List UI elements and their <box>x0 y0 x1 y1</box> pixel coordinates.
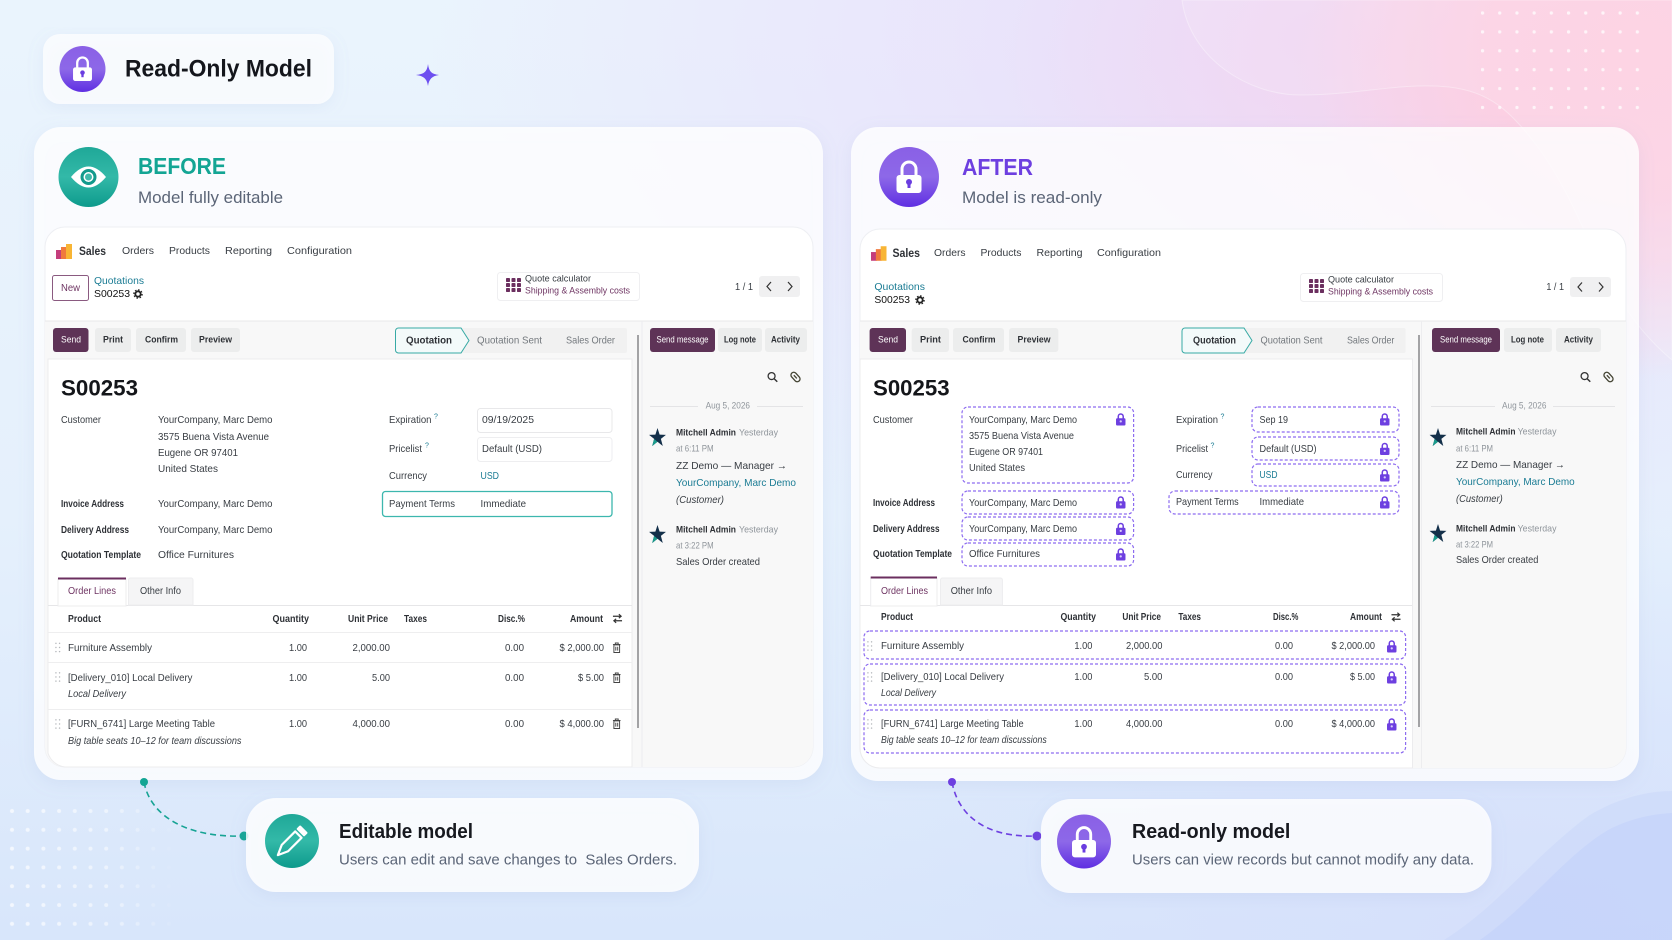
callout text: Users can view records but cannot modify any data. <box>1132 852 1474 868</box>
quotation fields: ? <box>434 414 438 420</box>
message 1: (Customer) <box>1456 493 1503 505</box>
quotation fields locked: Expiration <box>1176 414 1218 426</box>
row: large meeting table <box>864 710 1406 753</box>
quote calculator <box>1300 274 1442 302</box>
quote calculator: Quote calculator <box>525 274 591 284</box>
table header: Quantity <box>1060 611 1096 623</box>
status bar: Quotation Sent <box>1260 334 1323 346</box>
message 2: Sales Order created <box>676 556 760 568</box>
chatter: before: Aug 5, 2026 <box>706 400 750 412</box>
row: local delivery: Local Delivery <box>881 687 937 699</box>
message 1: (Customer) <box>676 494 724 506</box>
table header: Amount <box>1350 611 1382 623</box>
customer fields: YourCompany, Marc Demo <box>158 414 273 426</box>
icon: sparkle <box>416 64 439 86</box>
action buttons: Confirm <box>145 334 178 346</box>
nav menu: Orders <box>934 247 966 259</box>
tabs: Other Info <box>140 585 181 597</box>
row: furniture assembly: $ 2,000.00 <box>560 642 604 654</box>
action buttons: Send <box>878 334 898 346</box>
row: large meeting table: [FURN_6741] Large Meeting Table <box>881 718 1024 730</box>
message 1 <box>649 428 796 506</box>
action buttons: Confirm <box>962 334 996 346</box>
chatter: after <box>1422 321 1615 768</box>
quotation fields: 09/19/2025 <box>482 414 534 426</box>
nav menu: Sales <box>79 244 106 258</box>
table header <box>68 613 622 625</box>
quotation fields locked: USD <box>1260 469 1278 481</box>
customer fields locked: United States <box>969 462 1025 474</box>
row: large meeting table: [FURN_6741] Large Meeting Table <box>68 718 215 730</box>
table header: Taxes <box>404 613 427 625</box>
row: large meeting table: $ 4,000.00 <box>560 718 604 730</box>
nav menu: Products <box>169 245 210 257</box>
message 1: YourCompany, Marc Demo <box>1456 476 1575 488</box>
quotation fields: Expiration <box>389 414 432 426</box>
row: furniture assembly: 0.00 <box>505 642 524 654</box>
tabs: Order Lines <box>68 585 116 597</box>
status bar: Sales Order <box>1347 334 1395 346</box>
row: furniture assembly: 1.00 <box>289 642 307 654</box>
row: local delivery: 0.00 <box>1275 671 1293 683</box>
form sheet <box>48 359 632 767</box>
table header: Amount <box>570 613 603 625</box>
row: large meeting table: Big table seats 10–12 for team discussions <box>881 734 1047 746</box>
row: furniture assembly: 2,000.00 <box>1126 640 1163 652</box>
message 2: Mitchell Admin <box>1456 524 1516 534</box>
nav menu: Reporting <box>225 245 272 257</box>
nav menu <box>56 244 352 259</box>
nav menu: Products <box>980 247 1022 259</box>
breadcrumb: New <box>61 282 80 294</box>
quotation fields locked: Sep 19 <box>1260 414 1288 426</box>
quotation fields locked: Immediate <box>1260 496 1304 508</box>
tabs: Order Lines <box>881 585 928 597</box>
quotation fields locked: Payment Terms <box>1176 496 1239 508</box>
customer fields locked: 3575 Buena Vista Avenue <box>969 430 1074 442</box>
heading: before: BEFORE <box>138 153 226 179</box>
nav menu: Orders <box>122 245 154 257</box>
customer fields locked: Invoice Address <box>873 497 935 509</box>
title: Read-Only Model <box>125 56 312 82</box>
record number: S00253 <box>873 376 950 400</box>
table header: Unit Price <box>1122 611 1161 623</box>
message 2: at 3:22 PM <box>676 540 714 552</box>
connector: before to callout <box>140 778 248 840</box>
message 1: at 6:11 PM <box>1456 444 1493 454</box>
icon: title lock <box>60 46 106 92</box>
message 2: Sales Order created <box>1456 554 1539 566</box>
chatter buttons: Send message <box>1440 334 1492 346</box>
breadcrumb <box>52 275 144 300</box>
pager <box>1546 277 1611 297</box>
message 2: Yesterday <box>739 524 778 536</box>
chatter buttons: Activity <box>1564 334 1594 346</box>
message 1 <box>1430 426 1575 505</box>
quotation fields: Pricelist <box>389 443 422 455</box>
record number: S00253 <box>61 376 138 400</box>
customer fields: YourCompany, Marc Demo <box>158 498 273 510</box>
message 1: Mitchell Admin <box>1456 426 1516 438</box>
quotation fields: Immediate <box>480 498 526 510</box>
row: large meeting table <box>55 718 621 747</box>
message 2 <box>649 524 778 568</box>
row: large meeting table: 0.00 <box>1275 718 1293 730</box>
table header: Unit Price <box>348 613 388 625</box>
action buttons <box>53 328 240 352</box>
customer fields: Delivery Address <box>61 524 129 536</box>
message 2 <box>1430 524 1557 566</box>
message 1: ZZ Demo — Manager → <box>1456 459 1565 471</box>
customer fields: Office Furnitures <box>158 549 234 561</box>
row: large meeting table: 0.00 <box>505 718 524 730</box>
table header <box>881 611 1401 623</box>
breadcrumb: S00253 <box>874 294 910 306</box>
row: local delivery: 1.00 <box>289 672 307 684</box>
action buttons: Send <box>61 334 81 346</box>
breadcrumb: Quotations <box>94 275 144 287</box>
status bar: Quotation Sent <box>477 334 542 346</box>
row: local delivery: $ 5.00 <box>578 672 604 684</box>
row: furniture assembly <box>55 642 621 654</box>
row: furniture assembly <box>864 631 1406 659</box>
row: furniture assembly: Furniture Assembly <box>881 640 965 652</box>
tabs <box>48 578 632 606</box>
quotation fields locked: Currency <box>1176 469 1213 481</box>
table header: Taxes <box>1178 611 1201 623</box>
message 1: at 6:11 PM <box>676 444 714 454</box>
background wave: bottom right <box>1444 791 1672 940</box>
order lines table locked <box>864 611 1406 753</box>
customer fields locked: YourCompany, Marc Demo <box>969 497 1077 509</box>
breadcrumb: S00253 <box>94 288 130 300</box>
quotation fields locked: Pricelist <box>1176 443 1208 455</box>
customer fields locked: YourCompany, Marc Demo <box>969 414 1077 426</box>
customer fields locked: Delivery Address <box>873 523 940 535</box>
message 1: YourCompany, Marc Demo <box>676 477 796 489</box>
status bar: Sales Order <box>566 334 615 346</box>
callout: editable model <box>246 798 699 892</box>
icon: pencil <box>265 814 319 868</box>
tabs: Other Info <box>951 585 992 597</box>
action buttons: Print <box>103 334 124 346</box>
row: local delivery: 0.00 <box>505 672 524 684</box>
nav menu: Reporting <box>1036 247 1083 259</box>
nav menu <box>871 246 1161 261</box>
quote calculator: Shipping & Assembly costs <box>525 286 630 296</box>
quotation fields: ? <box>425 442 429 450</box>
nav menu: Sales <box>892 246 920 260</box>
panel: before <box>34 127 823 780</box>
pager: 1 / 1 <box>735 281 753 293</box>
row: local delivery: $ 5.00 <box>1350 671 1375 683</box>
scrollbar <box>637 335 639 728</box>
customer fields locked: Eugene OR 97401 <box>969 446 1043 458</box>
table header: Disc.% <box>498 613 526 625</box>
message 1: Mitchell Admin <box>676 428 736 438</box>
status bar <box>1182 328 1406 353</box>
icon: lock <box>1057 814 1111 868</box>
action buttons: Preview <box>199 334 233 346</box>
row: furniture assembly: $ 2,000.00 <box>1332 640 1375 652</box>
order lines table <box>48 613 632 747</box>
panel: after <box>851 127 1639 781</box>
row: large meeting table: 1.00 <box>1074 718 1093 730</box>
row: furniture assembly: 2,000.00 <box>352 642 390 654</box>
dot pattern: top right <box>1478 4 1640 116</box>
row: local delivery: [Delivery_010] Local Delivery <box>881 671 1005 683</box>
form sheet <box>860 359 1412 768</box>
chatter buttons <box>650 328 807 352</box>
chatter: before <box>642 321 807 767</box>
tabs <box>860 578 1412 606</box>
quotation fields locked: ? <box>1220 414 1224 420</box>
row: local delivery: 5.00 <box>1144 671 1163 683</box>
chatter buttons: Log note <box>724 334 756 346</box>
customer fields: Eugene OR 97401 <box>158 447 238 459</box>
chatter: after: Aug 5, 2026 <box>1502 400 1546 412</box>
customer fields locked <box>873 407 1134 566</box>
customer fields: United States <box>158 463 218 475</box>
icon: eye <box>58 147 118 207</box>
chatter buttons <box>1432 328 1601 352</box>
quotation fields locked <box>1169 407 1399 514</box>
title badge <box>43 34 334 104</box>
row: local delivery: 5.00 <box>372 672 390 684</box>
row: large meeting table: $ 4,000.00 <box>1332 718 1375 730</box>
quote calculator: Quote calculator <box>1328 274 1394 286</box>
row: furniture assembly: Furniture Assembly <box>68 642 153 654</box>
row: large meeting table: 4,000.00 <box>1126 718 1163 730</box>
status bar: Quotation <box>406 334 452 346</box>
icon: large lock <box>879 147 939 207</box>
message 1: Yesterday <box>739 428 778 438</box>
scrollbar <box>1418 335 1420 727</box>
row: local delivery <box>55 672 621 700</box>
customer fields: Quotation Template <box>61 549 141 561</box>
quotation fields: USD <box>480 470 499 482</box>
message 2: at 3:22 PM <box>1456 540 1493 550</box>
customer fields locked: Customer <box>873 414 913 426</box>
customer fields locked: Quotation Template <box>873 548 952 560</box>
customer fields: 3575 Buena Vista Avenue <box>158 431 269 443</box>
breadcrumb <box>874 281 925 306</box>
row: furniture assembly: 0.00 <box>1275 640 1293 652</box>
callout heading: Read-only model <box>1132 821 1290 843</box>
connector: after to callout <box>948 778 1042 840</box>
chatter buttons: Activity <box>771 334 801 346</box>
customer fields: Invoice Address <box>61 498 124 510</box>
chatter buttons: Send message <box>656 334 708 346</box>
quotation fields locked: Default (USD) <box>1260 443 1316 455</box>
pager: 1 / 1 <box>1546 281 1564 293</box>
action buttons <box>870 328 1058 352</box>
dot pattern: bottom left <box>10 809 140 926</box>
quote calculator <box>498 272 640 300</box>
pager <box>735 276 800 297</box>
customer fields locked: Office Furnitures <box>969 548 1040 560</box>
row: large meeting table: 1.00 <box>289 718 307 730</box>
table header: Quantity <box>272 613 309 625</box>
app window: after <box>860 229 1626 768</box>
customer fields: Customer <box>61 414 101 426</box>
subheading: before: Model fully editable <box>138 189 283 207</box>
app window: before <box>45 227 813 767</box>
callout: read-only model <box>1041 799 1492 893</box>
quotation fields: Payment Terms <box>389 498 455 510</box>
nav menu: Configuration <box>287 245 352 257</box>
row: local delivery <box>864 664 1406 705</box>
message 2: Yesterday <box>1518 524 1557 534</box>
table header: Product <box>68 613 101 625</box>
row: local delivery: 1.00 <box>1074 671 1093 683</box>
status bar <box>395 328 627 353</box>
nav menu: Configuration <box>1097 247 1161 259</box>
table header: Disc.% <box>1273 611 1299 623</box>
message 1: Yesterday <box>1518 426 1557 438</box>
background blob: top right <box>1182 0 1672 360</box>
quotation fields: Default (USD) <box>482 443 542 455</box>
action buttons: Print <box>920 334 942 346</box>
status bar: Quotation <box>1193 334 1236 346</box>
breadcrumb: Quotations <box>874 281 925 293</box>
row: large meeting table: Big table seats 10–12 for team discussions <box>68 735 242 747</box>
subheading: after: Model is read-only <box>962 189 1103 207</box>
row: local delivery: Local Delivery <box>68 688 127 700</box>
callout text: Users can edit and save changes to Sales Orders. <box>339 852 677 868</box>
quotation fields locked: ? <box>1210 442 1214 450</box>
table header: Product <box>881 611 913 623</box>
chatter buttons: Log note <box>1511 334 1544 346</box>
callout heading: Editable model <box>339 821 473 843</box>
quotation fields: Currency <box>389 470 428 482</box>
heading: after: AFTER <box>962 154 1033 180</box>
quote calculator: Shipping & Assembly costs <box>1328 286 1433 298</box>
message 1: ZZ Demo — Manager → <box>676 460 787 472</box>
row: local delivery: [Delivery_010] Local Delivery <box>68 672 193 684</box>
customer fields: YourCompany, Marc Demo <box>158 524 273 536</box>
row: large meeting table: 4,000.00 <box>352 718 390 730</box>
customer fields <box>61 414 273 561</box>
message 2: Mitchell Admin <box>676 524 736 536</box>
action buttons: Preview <box>1018 334 1051 346</box>
quotation fields <box>382 408 612 516</box>
customer fields locked: YourCompany, Marc Demo <box>969 523 1077 535</box>
row: furniture assembly: 1.00 <box>1074 640 1093 652</box>
